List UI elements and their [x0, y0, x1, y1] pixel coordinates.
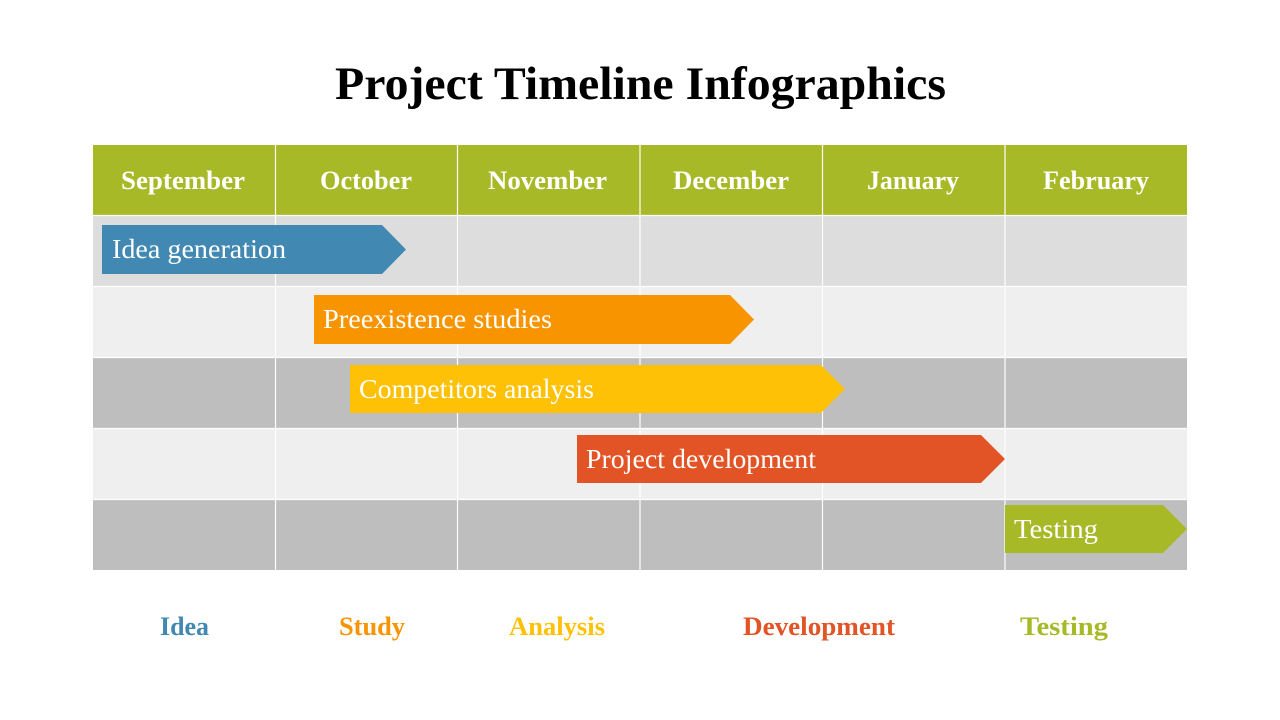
header row: months [93, 145, 1187, 216]
arrow: Competitors analysis: Competitors analysis [359, 374, 594, 404]
month: September: September [121, 166, 245, 195]
arrow: Testing: Testing [1014, 514, 1098, 544]
arrow: Idea generation: Idea generation [112, 234, 287, 264]
month: January: January [867, 166, 959, 195]
panel: timeline table [93, 145, 1187, 570]
title: Project Timeline Infographics [335, 58, 946, 110]
legend: Development: Development [743, 612, 895, 641]
arrow: Preexistence studies [314, 295, 754, 344]
arrow: Competitors analysis [350, 365, 845, 413]
month: October: October [320, 166, 412, 195]
legend [160, 612, 1108, 641]
arrow: Project development [577, 435, 1005, 483]
legend: Testing: Testing [1020, 612, 1108, 641]
month: November: November [488, 166, 607, 195]
legend: Study: Study [339, 612, 405, 641]
arrow: Idea generation [102, 225, 406, 274]
arrow: Project development: Project development [586, 444, 817, 474]
legend: Idea: Idea [160, 612, 209, 641]
month: December: December [673, 166, 789, 195]
table body rows [93, 216, 1187, 570]
month: February: February [1043, 166, 1149, 195]
legend: Analysis: Analysis [509, 612, 605, 641]
arrow: Testing [1005, 505, 1187, 553]
arrow: Preexistence studies: Preexistence studies [323, 304, 552, 334]
